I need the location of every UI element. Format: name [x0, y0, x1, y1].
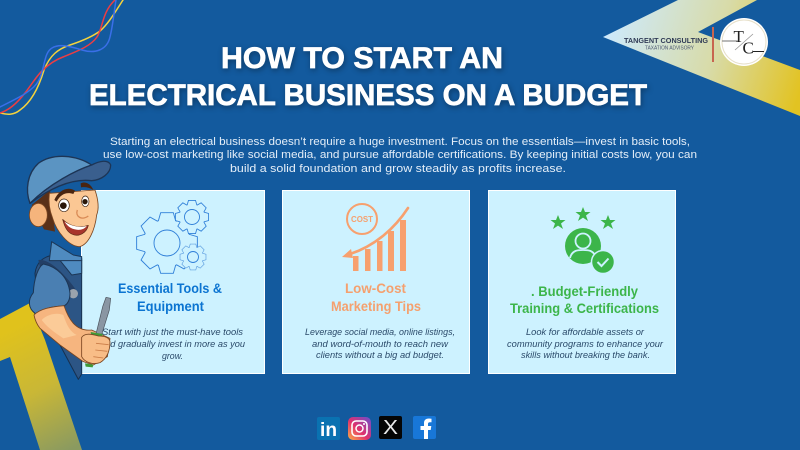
- heading: [510, 284, 659, 316]
- logo: Tangent Consulting: C: [742, 38, 754, 58]
- heading: Marketing Tips: [331, 299, 421, 314]
- description: Leverage social media, online listings,: [305, 327, 455, 338]
- title: HOW TO START AN: [221, 42, 503, 75]
- logo: Tangent Consulting: [624, 18, 768, 66]
- heading: [118, 281, 222, 314]
- description: Look for affordable assets or: [526, 327, 645, 338]
- intro paragraph: Starting an electrical business doesn’t require a huge investment. Focus on the essentials—invest in basic tools,: [110, 136, 690, 148]
- logo: Tangent Consulting: T: [734, 27, 744, 46]
- heading: Equipment: [137, 299, 204, 314]
- icon: cost chart: COST: [351, 215, 373, 224]
- decorative yellow shape bottom left: [0, 303, 82, 450]
- icon: instagram: [348, 417, 371, 440]
- icon: gears: [137, 201, 208, 273]
- mascot head: [27, 156, 111, 261]
- title: ELECTRICAL BUSINESS ON A BUDGET: [89, 79, 647, 112]
- description: Start with just the must-have tools: [102, 327, 243, 338]
- description: grow.: [162, 351, 183, 362]
- intro paragraph: build a solid foundation and grow steadily as profits increase.: [230, 163, 566, 175]
- company tagline: TAXATION ADVISORY: [645, 46, 695, 52]
- decorative chevron top right: [603, 0, 800, 116]
- description: [100, 327, 246, 362]
- heading: [331, 281, 421, 314]
- icon: X: X: [383, 417, 398, 439]
- description: clients without a big ad budget.: [316, 350, 444, 361]
- icon: certified person: [550, 207, 616, 274]
- icon: cost chart: [342, 204, 408, 271]
- title: [89, 42, 647, 112]
- heading: Essential Tools &: [118, 281, 222, 296]
- intro paragraph: use low-cost marketing like social media, and pursue affordable certifications. By keeping initial costs low, you can: [103, 149, 697, 161]
- mascot body: [29, 250, 111, 379]
- heading: . Budget-Friendly: [531, 284, 638, 299]
- panel: training and certifications: [488, 190, 676, 374]
- icon: linkedin: in: [320, 420, 337, 441]
- description: [305, 327, 455, 361]
- social icons: [317, 416, 436, 441]
- icon: facebook: [413, 416, 436, 439]
- heading: Training & Certifications: [510, 301, 659, 316]
- description: community programs to enhance your: [507, 339, 664, 350]
- description: skills without breaking the bank.: [521, 350, 650, 361]
- intro paragraph: [103, 136, 697, 175]
- description: and word-of-mouth to reach new: [312, 339, 449, 350]
- description: and gradually invest in more as you: [100, 339, 246, 350]
- decorative wires top left: [0, 0, 123, 114]
- company name: TANGENT CONSULTING: [624, 38, 709, 45]
- panel: essential tools: [82, 190, 264, 374]
- heading: Low-Cost: [345, 281, 406, 296]
- panel: low-cost marketing: [282, 190, 470, 374]
- description: [507, 327, 664, 361]
- illustration: electrician mascot: [27, 156, 111, 379]
